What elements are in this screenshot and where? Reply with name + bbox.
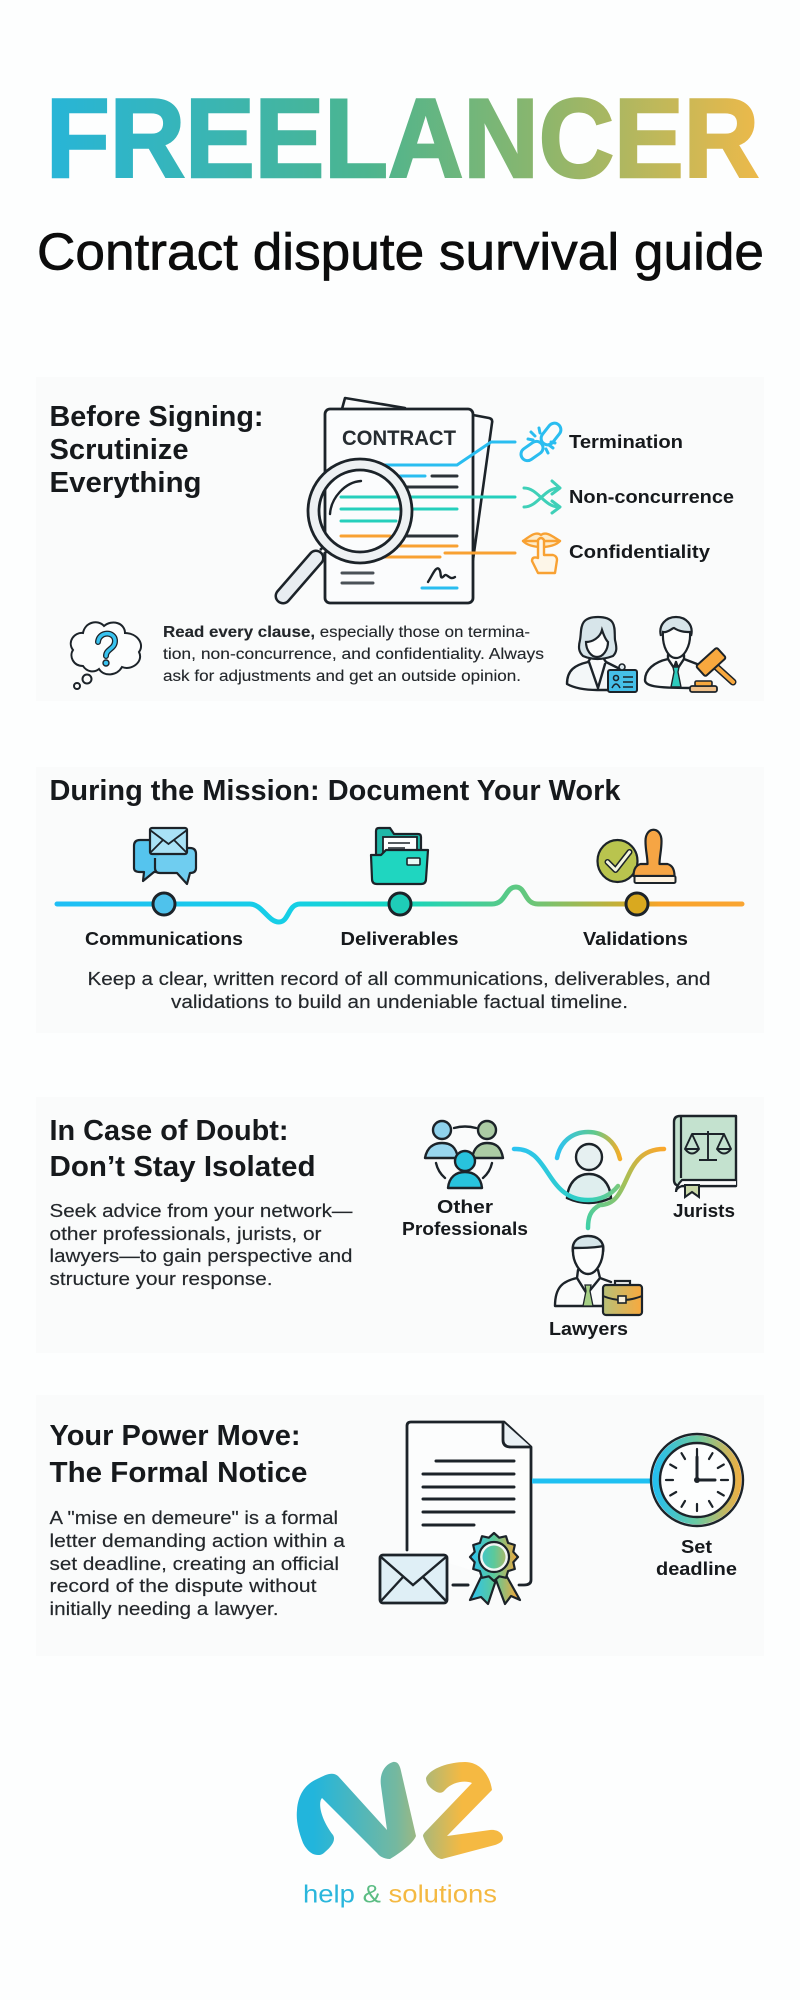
label: confidentiality: Confidentiality (569, 541, 711, 562)
text: seek advice: structure your response. (50, 1268, 272, 1289)
icon: lawyer with briefcase (555, 1236, 642, 1315)
icon: woman with id badge (567, 617, 637, 692)
text: keep a clear record: Keep a clear, written record of all communications, deliverables, and (88, 968, 710, 989)
text: keep a clear record: validations to build an undeniable factual timeline. (171, 991, 628, 1012)
panel: during the mission (36, 767, 764, 1033)
heading: in case of doubt: In Case of Doubt: (50, 1115, 288, 1147)
icon: envelope (380, 1555, 447, 1603)
label: other professionals: Other (437, 1196, 493, 1217)
label: set deadline: Set (681, 1536, 712, 1557)
text: mise en demeure: letter demanding action within a (50, 1530, 346, 1551)
node: deliverables (389, 893, 411, 915)
heading: your power move (50, 1420, 308, 1489)
heading: your power move: The Formal Notice (50, 1457, 308, 1489)
text: read every clause: Read every clause, especially those on termina- (163, 624, 530, 641)
heading: in case of doubt (50, 1115, 316, 1183)
icon: formal notice document (380, 1422, 531, 1604)
icon: crossing arrows (524, 481, 560, 513)
text: seek advice (50, 1200, 353, 1289)
heading: before signing: Scrutinize (50, 434, 188, 466)
icon: man with gavel (645, 617, 733, 692)
text: mise en demeure: A "mise en demeure" is a formal (50, 1507, 338, 1528)
label: other professionals: Professionals (402, 1218, 528, 1239)
icon: rosette seal (470, 1533, 520, 1604)
heading: your power move: Your Power Move: (50, 1420, 300, 1452)
logo: N2 mark (297, 1762, 503, 1859)
icon: magnifying glass (283, 459, 412, 596)
heading: in case of doubt: Don’t Stay Isolated (50, 1151, 316, 1183)
logo: tagline: help & solutions (303, 1880, 497, 1908)
text: read every clause: tion, non-concurrence, and confidentiality. Always (163, 646, 544, 663)
text: seek advice: other professionals, jurists, or (50, 1223, 322, 1244)
icon: communications (134, 828, 196, 884)
text: keep a clear record (88, 968, 710, 1012)
icon: central person with connecting curves (514, 1132, 664, 1228)
contract document illustration: CONTRACT (342, 427, 456, 450)
icon: thought cloud with question mark (71, 622, 141, 689)
subtitle: Contract dispute survival guide (37, 224, 764, 282)
label: set deadline (656, 1536, 737, 1579)
text: mise en demeure: set deadline, creating an official (50, 1553, 339, 1574)
label: deliverables: Deliverables (340, 928, 458, 949)
label: communications: Communications (85, 928, 243, 949)
icon: clock (651, 1434, 743, 1526)
panel: your power move (36, 1395, 764, 1656)
node: validations (626, 893, 648, 915)
label: other professionals (402, 1196, 528, 1239)
icon: lips and finger (523, 534, 560, 573)
panel: in case of doubt (36, 1097, 764, 1353)
text: read every clause: ask for adjustments and get an outside opinion. (163, 668, 521, 685)
text: read every clause (163, 624, 544, 685)
label: jurists: Jurists (673, 1200, 735, 1221)
heading: before signing: Everything (50, 467, 202, 499)
node: communications (153, 893, 175, 915)
heading: before signing (50, 401, 264, 499)
icon: other professionals group (425, 1121, 503, 1188)
timeline line (57, 887, 742, 922)
icon: broken chain (518, 421, 564, 463)
label: non-concurrence: Non-concurrence (569, 486, 734, 507)
label: termination: Termination (569, 431, 683, 452)
label: set deadline: deadline (656, 1558, 737, 1579)
icon: deliverables folder (371, 828, 428, 884)
heading: before signing: Before Signing: (50, 401, 264, 433)
panel: before signing (36, 377, 764, 701)
heading: during the mission: During the Mission: Document Your Work (50, 775, 621, 807)
text: mise en demeure: initially needing a lawyer. (50, 1598, 278, 1619)
contract document illustration (283, 398, 564, 603)
text: mise en demeure (50, 1507, 346, 1619)
icon: check and stamp (598, 830, 676, 883)
connector line (532, 1478, 652, 1484)
text: mise en demeure: record of the dispute without (50, 1575, 316, 1596)
text: seek advice: Seek advice from your network— (50, 1200, 353, 1221)
icon: law book with scales (674, 1116, 736, 1197)
text: seek advice: lawyers—to gain perspective and (50, 1245, 352, 1266)
label: validations: Validations (583, 928, 688, 949)
label: lawyers: Lawyers (549, 1318, 628, 1339)
title: FREELANCER (46, 76, 759, 201)
